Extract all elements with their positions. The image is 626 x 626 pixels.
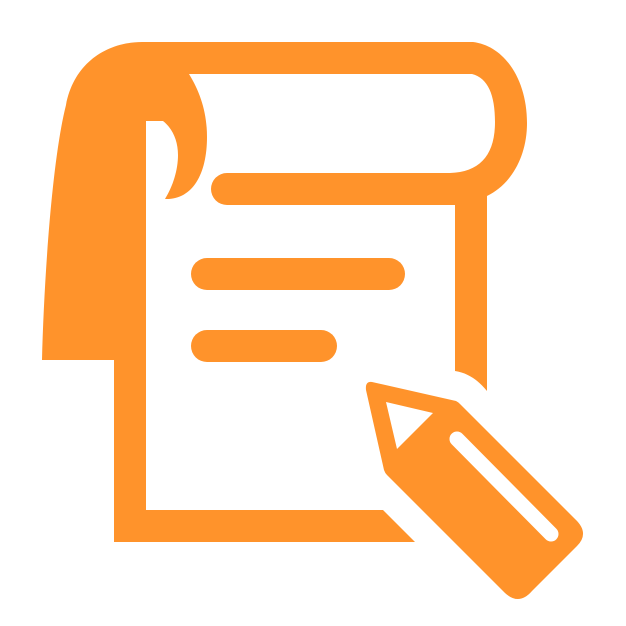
icon: pencil [366, 382, 583, 599]
text line 1 [191, 258, 405, 290]
pencil highlight slot [457, 439, 551, 534]
scroll sheet outline [42, 42, 527, 542]
text line 2 [191, 330, 337, 362]
